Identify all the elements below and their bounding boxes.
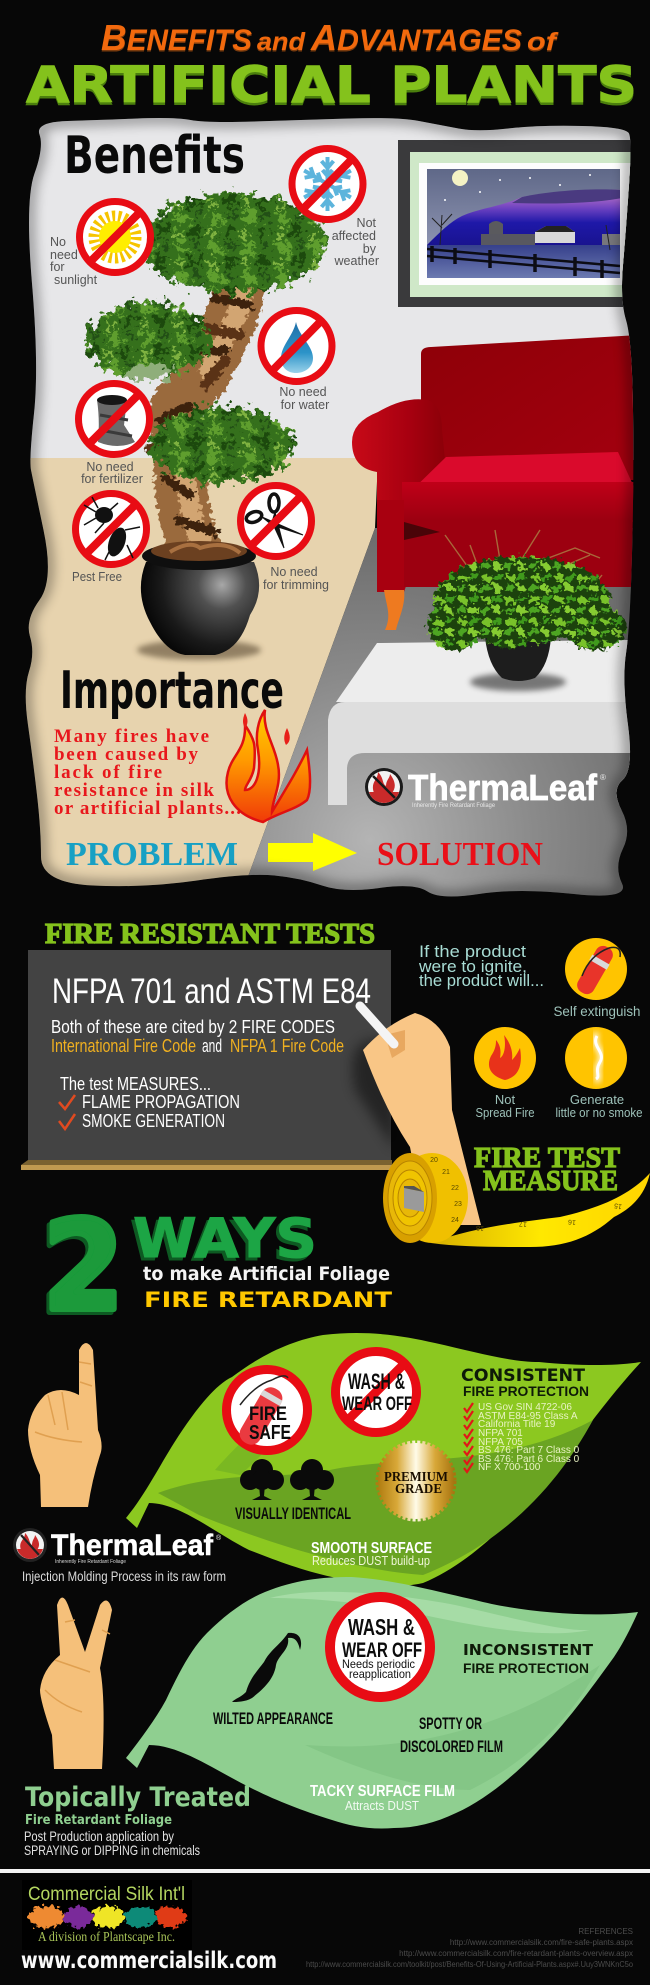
list: certifications: NFPA 705 (478, 1437, 523, 1448)
chalk text: test measures: The test MEASURES... (60, 1074, 211, 1094)
label: no need for sunlight (50, 235, 98, 287)
leaf shape (126, 1577, 638, 1829)
panel: room scene (26, 118, 634, 896)
icon: no wash and wear off: WASH & (348, 1369, 405, 1394)
label: no need for sunlight: for (50, 260, 65, 274)
icon: no fertilizer (78, 384, 150, 454)
ThermaLeaf logo: ® (216, 1534, 222, 1542)
illustration: measuring tape: 16 (568, 1218, 576, 1225)
label: visually identical: VISUALLY IDENTICAL (235, 1504, 351, 1523)
label: not affected by weather: weather (334, 254, 379, 268)
heading: inconsistent fire protection (463, 1641, 594, 1676)
chalk text: fire codes: Both of these are cited by 2 FIRE CODES (51, 1017, 335, 1037)
icon: no sunlight (80, 202, 150, 272)
list: certifications (464, 1402, 580, 1473)
label: spotty or discolored film (400, 1714, 503, 1756)
badge: premium grade: GRADE (395, 1482, 442, 1497)
division line: A division of Plantscape Inc. (38, 1930, 175, 1945)
ThermaLeaf logo in scene: Inherently Fire Retardant Foliage (412, 803, 496, 809)
ThermaLeaf logo: ThermaLeaf (51, 1529, 214, 1562)
list: certifications: ASTM E84-95 Class A (478, 1411, 578, 1422)
chalk text: test measures (60, 1074, 240, 1131)
grey floor (248, 528, 633, 896)
illustration: measuring tape (383, 1153, 650, 1247)
illustration: measuring tape: 17 (519, 1220, 527, 1227)
heading: inconsistent fire protection: FIRE PROTECTION (463, 1661, 589, 1676)
text: fires warning: or artificial plants... (54, 798, 241, 819)
illustration: measuring tape: 23 (454, 1201, 462, 1208)
description: Post Production application by (24, 1828, 174, 1844)
description (24, 1828, 200, 1858)
label: no need for fertilizer: for fertilizer (81, 472, 143, 486)
foliage clumps (86, 193, 326, 483)
wall (29, 118, 634, 460)
title (26, 17, 637, 114)
big numeral 2: 2 (43, 1195, 124, 1339)
label: not affected by weather: by (363, 242, 377, 256)
label: not spread fire: Not (495, 1092, 516, 1107)
references (306, 1927, 634, 1969)
icon: no weather (292, 148, 363, 220)
illustration: measuring tape: 22 (451, 1185, 459, 1192)
chalk text: fire codes: and (202, 1036, 222, 1056)
chalk heading: NFPA 701 and ASTM E84 (52, 972, 371, 1011)
text: if the product ignites (418, 942, 544, 990)
text: fires warning: lack of fire (54, 762, 162, 783)
chalk text: fire codes: NFPA 1 Fire Code (230, 1036, 344, 1056)
list: certifications: US Gov SIN 4722-06 (478, 1402, 572, 1413)
title line 1: ADVANTAGES (310, 17, 522, 58)
small potted plant (427, 530, 627, 691)
references: REFERENCES (578, 1927, 633, 1936)
heading: Benefits: Benefits (64, 126, 245, 186)
chalk text: fire codes (51, 1017, 344, 1056)
references: http://www.commercialsilk.com/toolkit/post/Benefits-Of-Using-Artificial-Plants.aspx#.Uuy3WNKnC5o (306, 1960, 634, 1969)
label: no need for water: No need (279, 385, 327, 399)
title line 1: and (257, 28, 306, 56)
label: not affected by weather: affected (332, 229, 376, 243)
label: not affected by weather: Not (357, 216, 377, 230)
label: no need for sunlight: sunlight (54, 273, 98, 287)
icon: no water (261, 310, 332, 382)
label: spotty or discolored film: SPOTTY OR (419, 1714, 482, 1733)
title line 2: ARTIFICIAL PLANTS (26, 56, 637, 114)
heading: Topically Treated (25, 1782, 251, 1813)
references: http://www.commercialsilk.com/fire-safe-plants.aspx (450, 1938, 633, 1947)
arrow: problem to solution (268, 833, 357, 871)
heading: 2 ways (43, 1195, 393, 1339)
subheading: Fire Retardant Foliage (25, 1812, 172, 1828)
subtitle emphasis: FIRE RETARDANT (144, 1288, 393, 1312)
ThermaLeaf logo in scene: ThermaLeaf (408, 767, 598, 808)
picture frame (398, 140, 639, 307)
icon: wash and wear off needs reapplication (330, 1597, 430, 1697)
beige floor (26, 458, 377, 886)
icon: not spread fire (474, 1027, 536, 1089)
illustration: measuring tape: 20 (430, 1157, 438, 1164)
heading: inconsistent fire protection: INCONSISTENT (463, 1641, 594, 1659)
text: topically treated (24, 1782, 251, 1858)
label: solution: SOLUTION (377, 836, 543, 873)
icon: wash and wear off needs reapplication: Needs periodic (342, 1657, 415, 1671)
illustration: two fingers hand (40, 1598, 112, 1769)
list: certifications: BS 476: Part 6 Class 0 (478, 1454, 580, 1465)
illustration: measuring tape: 24 (451, 1217, 459, 1224)
label: no need for water (280, 386, 330, 409)
chalk text: test measures: FLAME PROPAGATION (82, 1092, 240, 1112)
icon: wash and wear off needs reapplication: reapplication (349, 1667, 411, 1681)
icon: wash and wear off needs reapplication: WASH & (348, 1614, 415, 1640)
list: certifications: NF X 700-100 (478, 1462, 541, 1473)
text: if the product ignites: were to ignite, (418, 957, 527, 976)
check marks (59, 1095, 75, 1129)
illustration: measuring tape: 21 (442, 1169, 450, 1176)
heading: consistent fire protection: CONSISTENT (461, 1366, 585, 1386)
icon: wilted leaf (232, 1633, 301, 1702)
word WAYS: WAYS (133, 1207, 317, 1270)
ThermaLeaf logo: Inherently Fire Retardant Foliage (55, 1559, 126, 1565)
illustration: hand with chalk (360, 1006, 481, 1225)
label: smooth surface: SMOOTH SURFACE (311, 1540, 432, 1557)
label: pest free: Pest Free (72, 570, 122, 584)
label: no need for fertilizer: No need (86, 460, 134, 474)
ThermaLeaf logo in scene: ® (600, 773, 606, 782)
label: no need for trimming: for trimming (263, 578, 329, 592)
icon: no wash and wear off: WEAR OFF (342, 1394, 412, 1415)
heading: Importance: Importance (60, 661, 284, 721)
text: fires warning: been caused by (54, 744, 198, 765)
company name: Commercial Silk Int'l (28, 1884, 185, 1905)
label: no need for fertilizer (81, 462, 143, 483)
label: wilted appearance: WILTED APPEARANCE (213, 1709, 333, 1728)
list: certifications: NFPA 701 (478, 1428, 523, 1439)
panel: chalkboard (21, 950, 395, 1170)
icon: no trimming (240, 486, 312, 556)
icon: fire safe: FIRE (249, 1404, 287, 1425)
plant row (28, 1906, 186, 1928)
label: generate little or no smoke: Generate (570, 1092, 624, 1107)
label: spotty or discolored film: DISCOLORED FILM (400, 1737, 503, 1756)
description: SPRAYING or DIPPING in chemicals (24, 1842, 200, 1858)
heading: fire test measure: MEASURE (483, 1165, 618, 1197)
icon: identical trees (240, 1459, 334, 1500)
icon: wash and wear off needs reapplication: WEAR OFF (342, 1639, 422, 1662)
chalk text: test measures: SMOKE GENERATION (82, 1111, 225, 1131)
label: no need for sunlight: No (50, 235, 66, 249)
label: no need for water: for water (281, 398, 329, 412)
pot (141, 541, 259, 655)
illustration: one finger hand (28, 1343, 102, 1507)
icon: little or no smoke (565, 1027, 627, 1089)
label: self extinguish: Self extinguish (554, 1003, 640, 1019)
label: attracts dust: Attracts DUST (345, 1798, 419, 1813)
icon: flame (227, 710, 310, 822)
label: reduces dust: Reduces DUST build-up (312, 1553, 430, 1568)
bonsai plant (86, 193, 326, 660)
trunk (150, 285, 250, 550)
icon: fire safe: SAFE (249, 1422, 291, 1444)
heading: fire test measure: FIRE TEST (474, 1142, 620, 1174)
subtitle: to make Artificial Foliage (143, 1263, 390, 1285)
illustration: measuring tape: 18 (476, 1224, 484, 1231)
chalk text: fire codes: International Fire Code (51, 1036, 196, 1056)
label: not spread fire (476, 1092, 534, 1120)
red armchair (352, 335, 640, 630)
text: fires warning: resistance in silk (54, 780, 214, 801)
badge: premium grade (378, 1443, 454, 1519)
text: fires warning: Many fires have (54, 726, 209, 747)
heading: fire resistant tests: FIRE RESISTANT TESTS (45, 919, 375, 950)
label: not spread fire: Spread Fire (476, 1105, 534, 1120)
leaf shape (126, 1333, 641, 1586)
icon: pest free (76, 494, 146, 564)
text: fires warning (54, 726, 241, 819)
label: problem: PROBLEM (66, 836, 238, 873)
list: certifications: BS 476: Part 7 Class 0 (478, 1445, 580, 1456)
footer logo (22, 1880, 192, 1950)
label: tacky surface film: TACKY SURFACE FILM (310, 1783, 455, 1800)
heading: consistent fire protection: FIRE PROTECTION (463, 1383, 589, 1399)
text: if the product ignites: the product will... (419, 971, 544, 990)
label: no need for trimming: No need (270, 565, 318, 579)
icon: self extinguish (565, 938, 627, 1000)
label: not affected by weather (332, 218, 379, 265)
heading: fire test measure (474, 1142, 620, 1197)
label: no need for trimming (263, 565, 329, 592)
title line 1 (101, 17, 559, 58)
list: certifications: California Title 19 (478, 1419, 556, 1430)
references: http://www.commercialsilk.com/fire-retardant-plants-overview.aspx (399, 1949, 633, 1958)
icon: fire safe (226, 1370, 308, 1450)
icon: no wash and wear off (336, 1352, 416, 1432)
badge: premium grade: PREMIUM (384, 1470, 448, 1485)
panel: consistent leaf (126, 1333, 641, 1586)
white table (328, 640, 640, 810)
website: www.commercialsilk.com (21, 1948, 277, 1974)
caption: injection molding: Injection Molding Process in its raw form (22, 1568, 226, 1584)
heading: consistent fire protection (461, 1366, 589, 1399)
title line 1: of (527, 28, 559, 56)
illustration: measuring tape: 15 (614, 1201, 623, 1210)
title line 1: BENEFITS (101, 17, 252, 58)
pot shadow (137, 640, 261, 660)
text: if the product ignites: If the product (419, 942, 526, 961)
label: no need for sunlight: need (50, 248, 78, 262)
panel: inconsistent leaf (126, 1577, 638, 1829)
label: generate little or no smoke (556, 1092, 642, 1120)
